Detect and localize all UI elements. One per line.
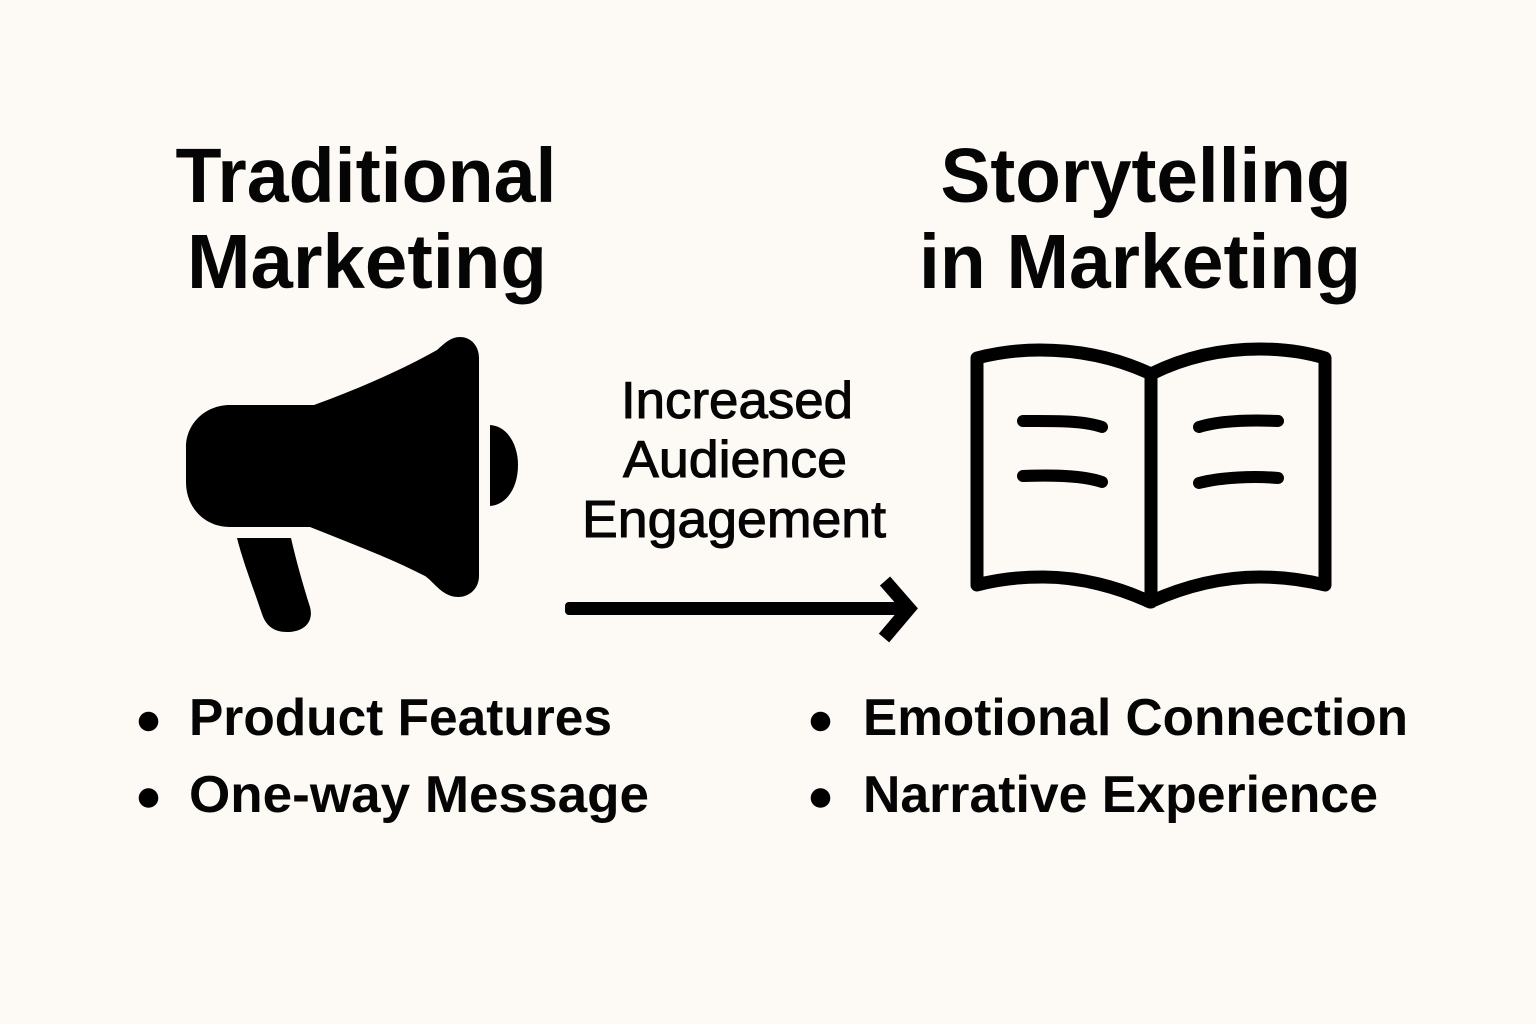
- heading: Storytelling in Marketing: Storytelling: [940, 133, 1352, 219]
- heading: Traditional Marketing: Marketing: [187, 219, 547, 305]
- heading: Storytelling in Marketing: [919, 133, 1361, 305]
- label: Increased Audience Engagement: Engagement: [582, 491, 887, 549]
- list: traditional marketing points: One-way Message: [189, 766, 649, 824]
- icon: open book: [977, 349, 1325, 602]
- icon: megaphone: [186, 337, 518, 632]
- book text lines: [1023, 421, 1278, 483]
- heading: Traditional Marketing: [176, 133, 556, 305]
- heading: Storytelling in Marketing: in Marketing: [919, 219, 1361, 305]
- list: storytelling points: Emotional Connection: [863, 689, 1408, 747]
- list: traditional marketing points: Product Features: [189, 689, 612, 747]
- list: storytelling points: [811, 689, 1408, 824]
- label: Increased Audience Engagement: Audience: [623, 431, 847, 489]
- arrow: [565, 581, 909, 638]
- label: Increased Audience Engagement: [582, 372, 887, 549]
- list: traditional marketing points: [139, 689, 649, 824]
- heading: Traditional Marketing: Traditional: [176, 133, 556, 219]
- list: storytelling points: Narrative Experience: [863, 766, 1378, 824]
- label: Increased Audience Engagement: Increased: [621, 372, 853, 430]
